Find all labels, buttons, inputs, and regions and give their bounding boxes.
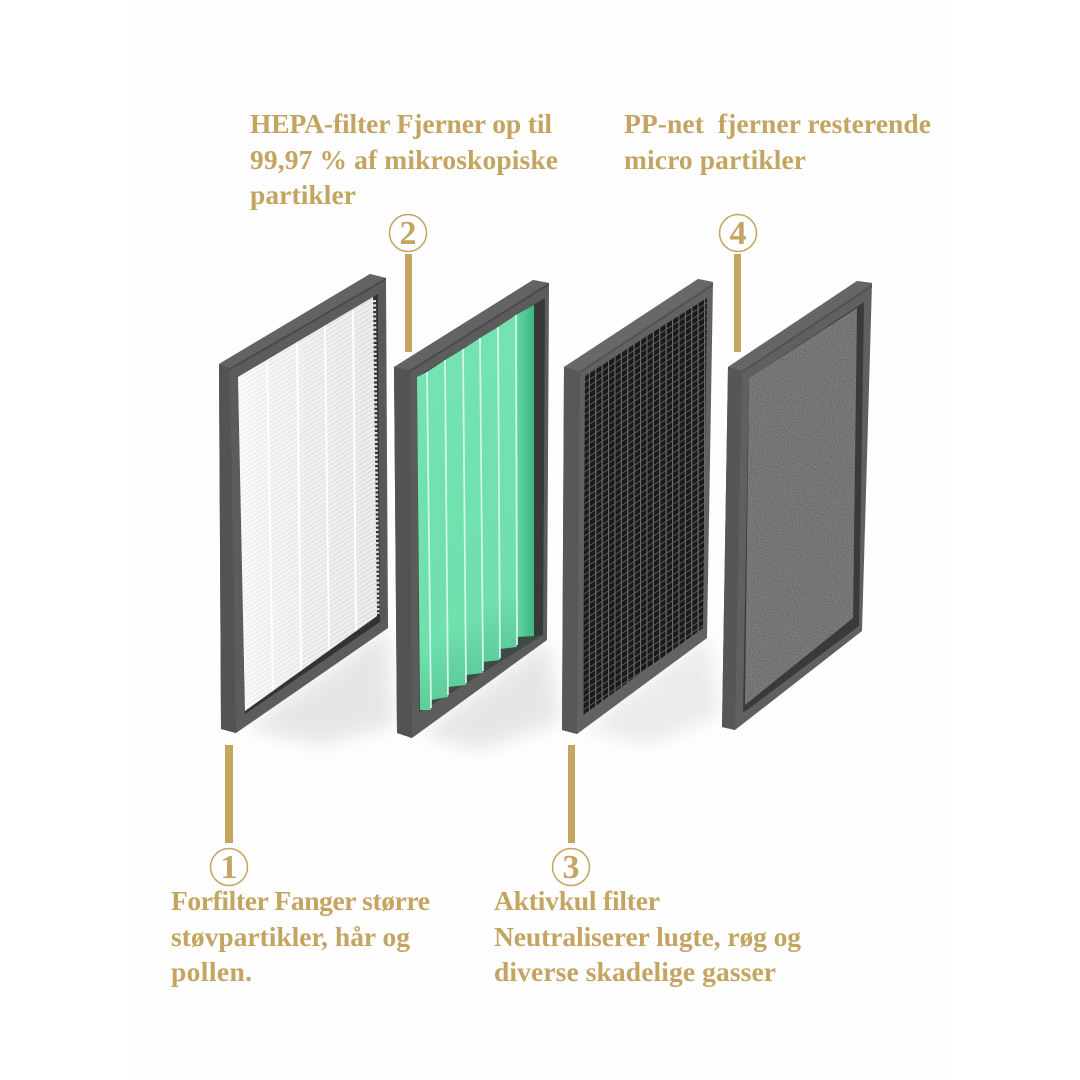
marker 3: 3 <box>562 849 580 886</box>
label 4: PP-net text: PP-net fjerner resterende <box>624 108 931 139</box>
green pleats <box>417 305 534 710</box>
label 3: activated carbon text <box>494 885 801 987</box>
connector bar 4 <box>734 254 741 352</box>
filter 4: PP net <box>722 281 872 730</box>
label 2: HEPA filter text: 99,97 % af mikroskopiske <box>250 144 558 175</box>
floor shadows <box>245 628 720 750</box>
marker 1: 1 <box>220 849 238 886</box>
filter 1: white pre-filter <box>219 274 388 733</box>
label 1: pre-filter text: Forfilter Fanger større <box>171 885 430 916</box>
marker 2 <box>390 214 426 252</box>
label 3: activated carbon text: Aktivkul filter <box>494 885 660 916</box>
label 1: pre-filter text <box>171 885 430 987</box>
label 2: HEPA filter text <box>250 108 558 210</box>
label 3: activated carbon text: diverse skadelige gasser <box>494 956 776 987</box>
marker 3 <box>552 848 590 886</box>
connector bar 3 <box>568 745 575 843</box>
marker 2: 2 <box>400 215 416 252</box>
label 1: pre-filter text: pollen. <box>171 956 252 987</box>
label 2: HEPA filter text: partikler <box>250 179 356 210</box>
filter 2: green HEPA filter <box>394 280 549 738</box>
marker 4 <box>720 214 756 252</box>
marker 1 <box>210 848 248 886</box>
infographic canvas <box>171 114 930 987</box>
connector bar 1 <box>225 745 233 843</box>
filter 3: activated carbon mesh <box>562 279 715 734</box>
marker 4: 4 <box>730 215 746 252</box>
connector bar 2 <box>405 254 412 352</box>
label 3: activated carbon text: Neutraliserer lugte, røg og <box>494 921 801 952</box>
label 4: PP-net text: micro partikler <box>624 144 806 175</box>
label 4: PP-net text <box>624 108 931 175</box>
label 1: pre-filter text: støvpartikler, hår og <box>171 921 410 952</box>
label 2: HEPA filter text: HEPA-filter Fjerner op til <box>250 108 552 139</box>
